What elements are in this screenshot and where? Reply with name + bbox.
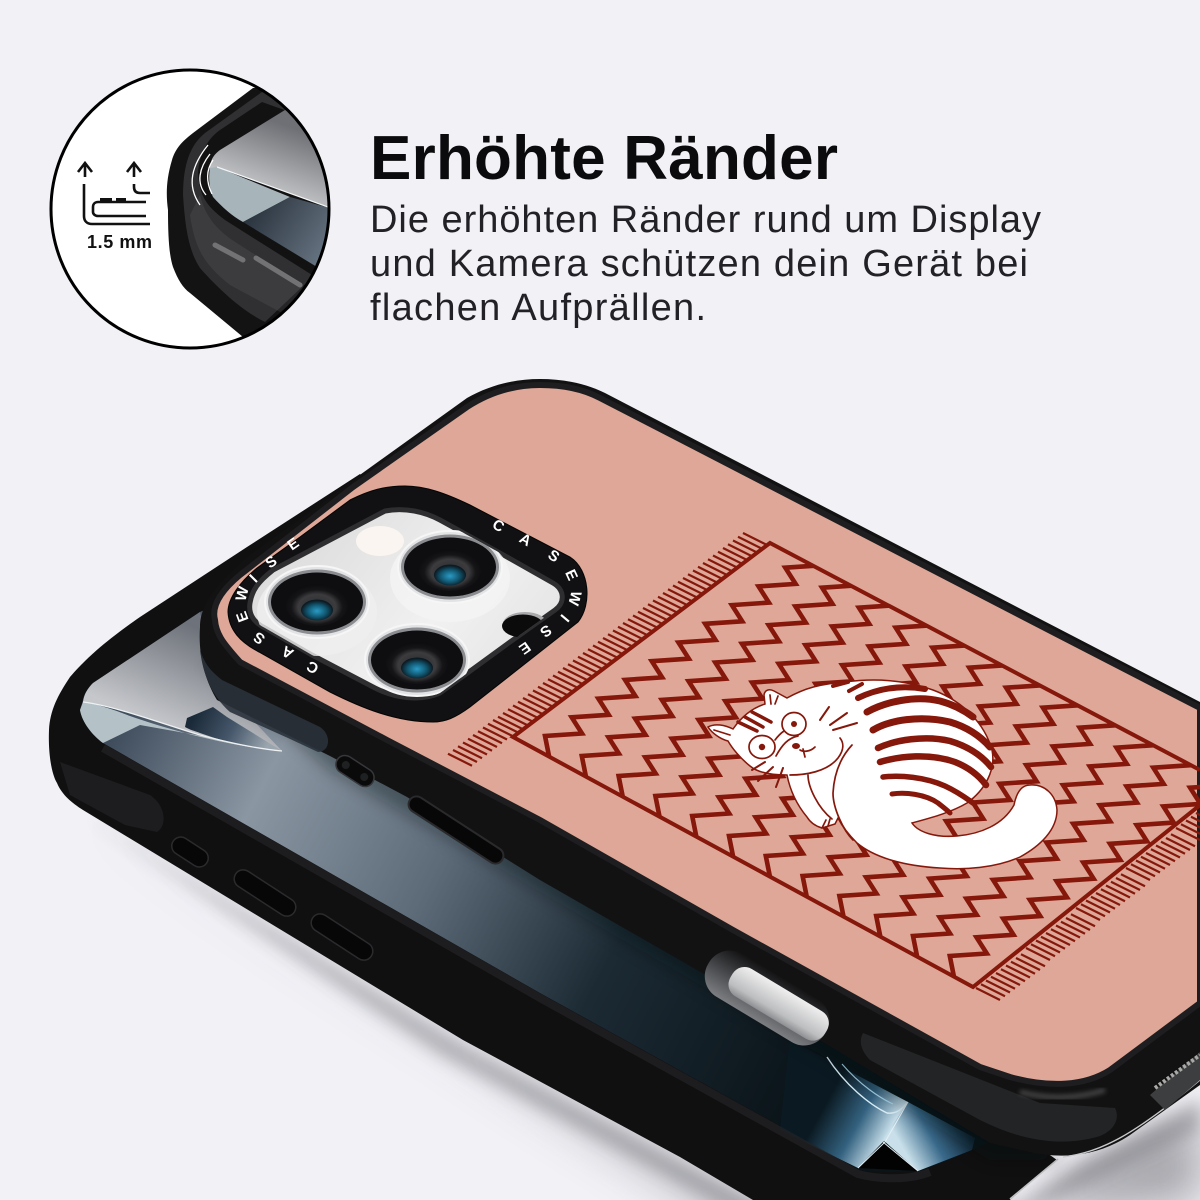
dark notch <box>185 707 282 751</box>
front phone case <box>200 379 1200 1156</box>
ring lettering: S <box>262 552 280 572</box>
rim highlight streaks <box>215 245 300 285</box>
rim highlight streak <box>1020 1090 1105 1097</box>
rug zigzags <box>542 564 1200 976</box>
lens plateau <box>257 586 320 656</box>
back phone case <box>49 474 1057 1200</box>
rim height label: 1.5 mm <box>87 232 152 252</box>
cat face <box>714 695 857 840</box>
front phone shadow on screen <box>200 660 1060 1160</box>
ring lettering: A <box>279 642 297 662</box>
front bumper left <box>200 650 328 752</box>
impact arcs <box>192 145 208 205</box>
ring lettering: S <box>545 546 563 566</box>
microphone cutout <box>502 612 547 638</box>
ring lettering: I <box>557 611 572 625</box>
body text: und Kamera schützen dein Gerät bei <box>370 243 1028 285</box>
lens 3 <box>365 624 469 696</box>
ring lettering <box>233 516 584 677</box>
ring lettering: E <box>284 534 302 554</box>
silver lower outline <box>1063 1080 1200 1157</box>
camera ring <box>228 486 587 722</box>
back phone <box>49 474 1058 1200</box>
rug illustration <box>448 493 1200 1000</box>
rim height diagram <box>78 163 150 224</box>
screen dark wallpaper <box>243 197 328 266</box>
ring lettering: S <box>250 628 268 648</box>
title: Erhöhte Ränder <box>370 124 838 193</box>
right-side bumper <box>1150 1052 1200 1110</box>
wallpaper light rays <box>780 1040 975 1171</box>
case corner <box>166 88 306 336</box>
ring lettering: E <box>561 567 581 583</box>
ring lettering: E <box>233 609 252 624</box>
ring lettering: I <box>246 571 261 586</box>
inset circle: raised rim close-up <box>51 70 360 348</box>
button: action <box>168 834 212 870</box>
ring lettering: E <box>516 638 534 658</box>
button: volume up <box>231 866 299 920</box>
ring lettering: A <box>516 530 534 550</box>
rug border <box>513 543 1200 987</box>
cat pupils and nose <box>759 721 800 750</box>
drop shadow under phones <box>75 812 1200 1200</box>
cat illustration <box>708 680 1057 869</box>
mute switch <box>332 752 378 790</box>
body text: Die erhöhten Ränder rund um Display <box>370 199 1041 241</box>
button: power <box>406 793 506 867</box>
button: volume down <box>308 910 376 964</box>
silver bottom edge <box>1010 1159 1058 1199</box>
front corner bumper bottom <box>861 1033 1117 1142</box>
screen lower glass <box>209 167 290 222</box>
lens 2 <box>398 531 502 603</box>
camera bump <box>228 486 587 722</box>
ring lettering: W <box>564 589 584 608</box>
flash <box>356 526 404 556</box>
inner rim <box>183 92 311 322</box>
back rim inner band <box>103 748 930 1178</box>
body text <box>370 199 1041 329</box>
cat stripes <box>738 682 991 813</box>
fringe: lower-right <box>976 794 1200 1000</box>
port metal pin <box>723 962 834 1046</box>
ring lettering: C <box>489 516 507 536</box>
ring lettering: S <box>537 621 555 641</box>
light glare sliver <box>80 702 282 751</box>
cat silhouette <box>708 680 1057 869</box>
charging port <box>696 942 838 1054</box>
fringe: upper-left <box>448 533 767 766</box>
front phone <box>200 379 1200 1160</box>
body text: flachen Aufprällen. <box>370 287 706 329</box>
translucent corner bumper <box>60 762 164 832</box>
back phone screen <box>80 590 987 1172</box>
phone back face: pink <box>214 385 1200 1084</box>
camera window <box>250 510 562 698</box>
circle background <box>51 70 329 348</box>
upper grey glass area <box>83 612 282 751</box>
screen upper <box>210 110 328 206</box>
ring lettering: W <box>233 584 253 603</box>
ring lettering: C <box>304 657 322 677</box>
circle outline <box>51 70 329 348</box>
lens 1 <box>265 566 369 638</box>
